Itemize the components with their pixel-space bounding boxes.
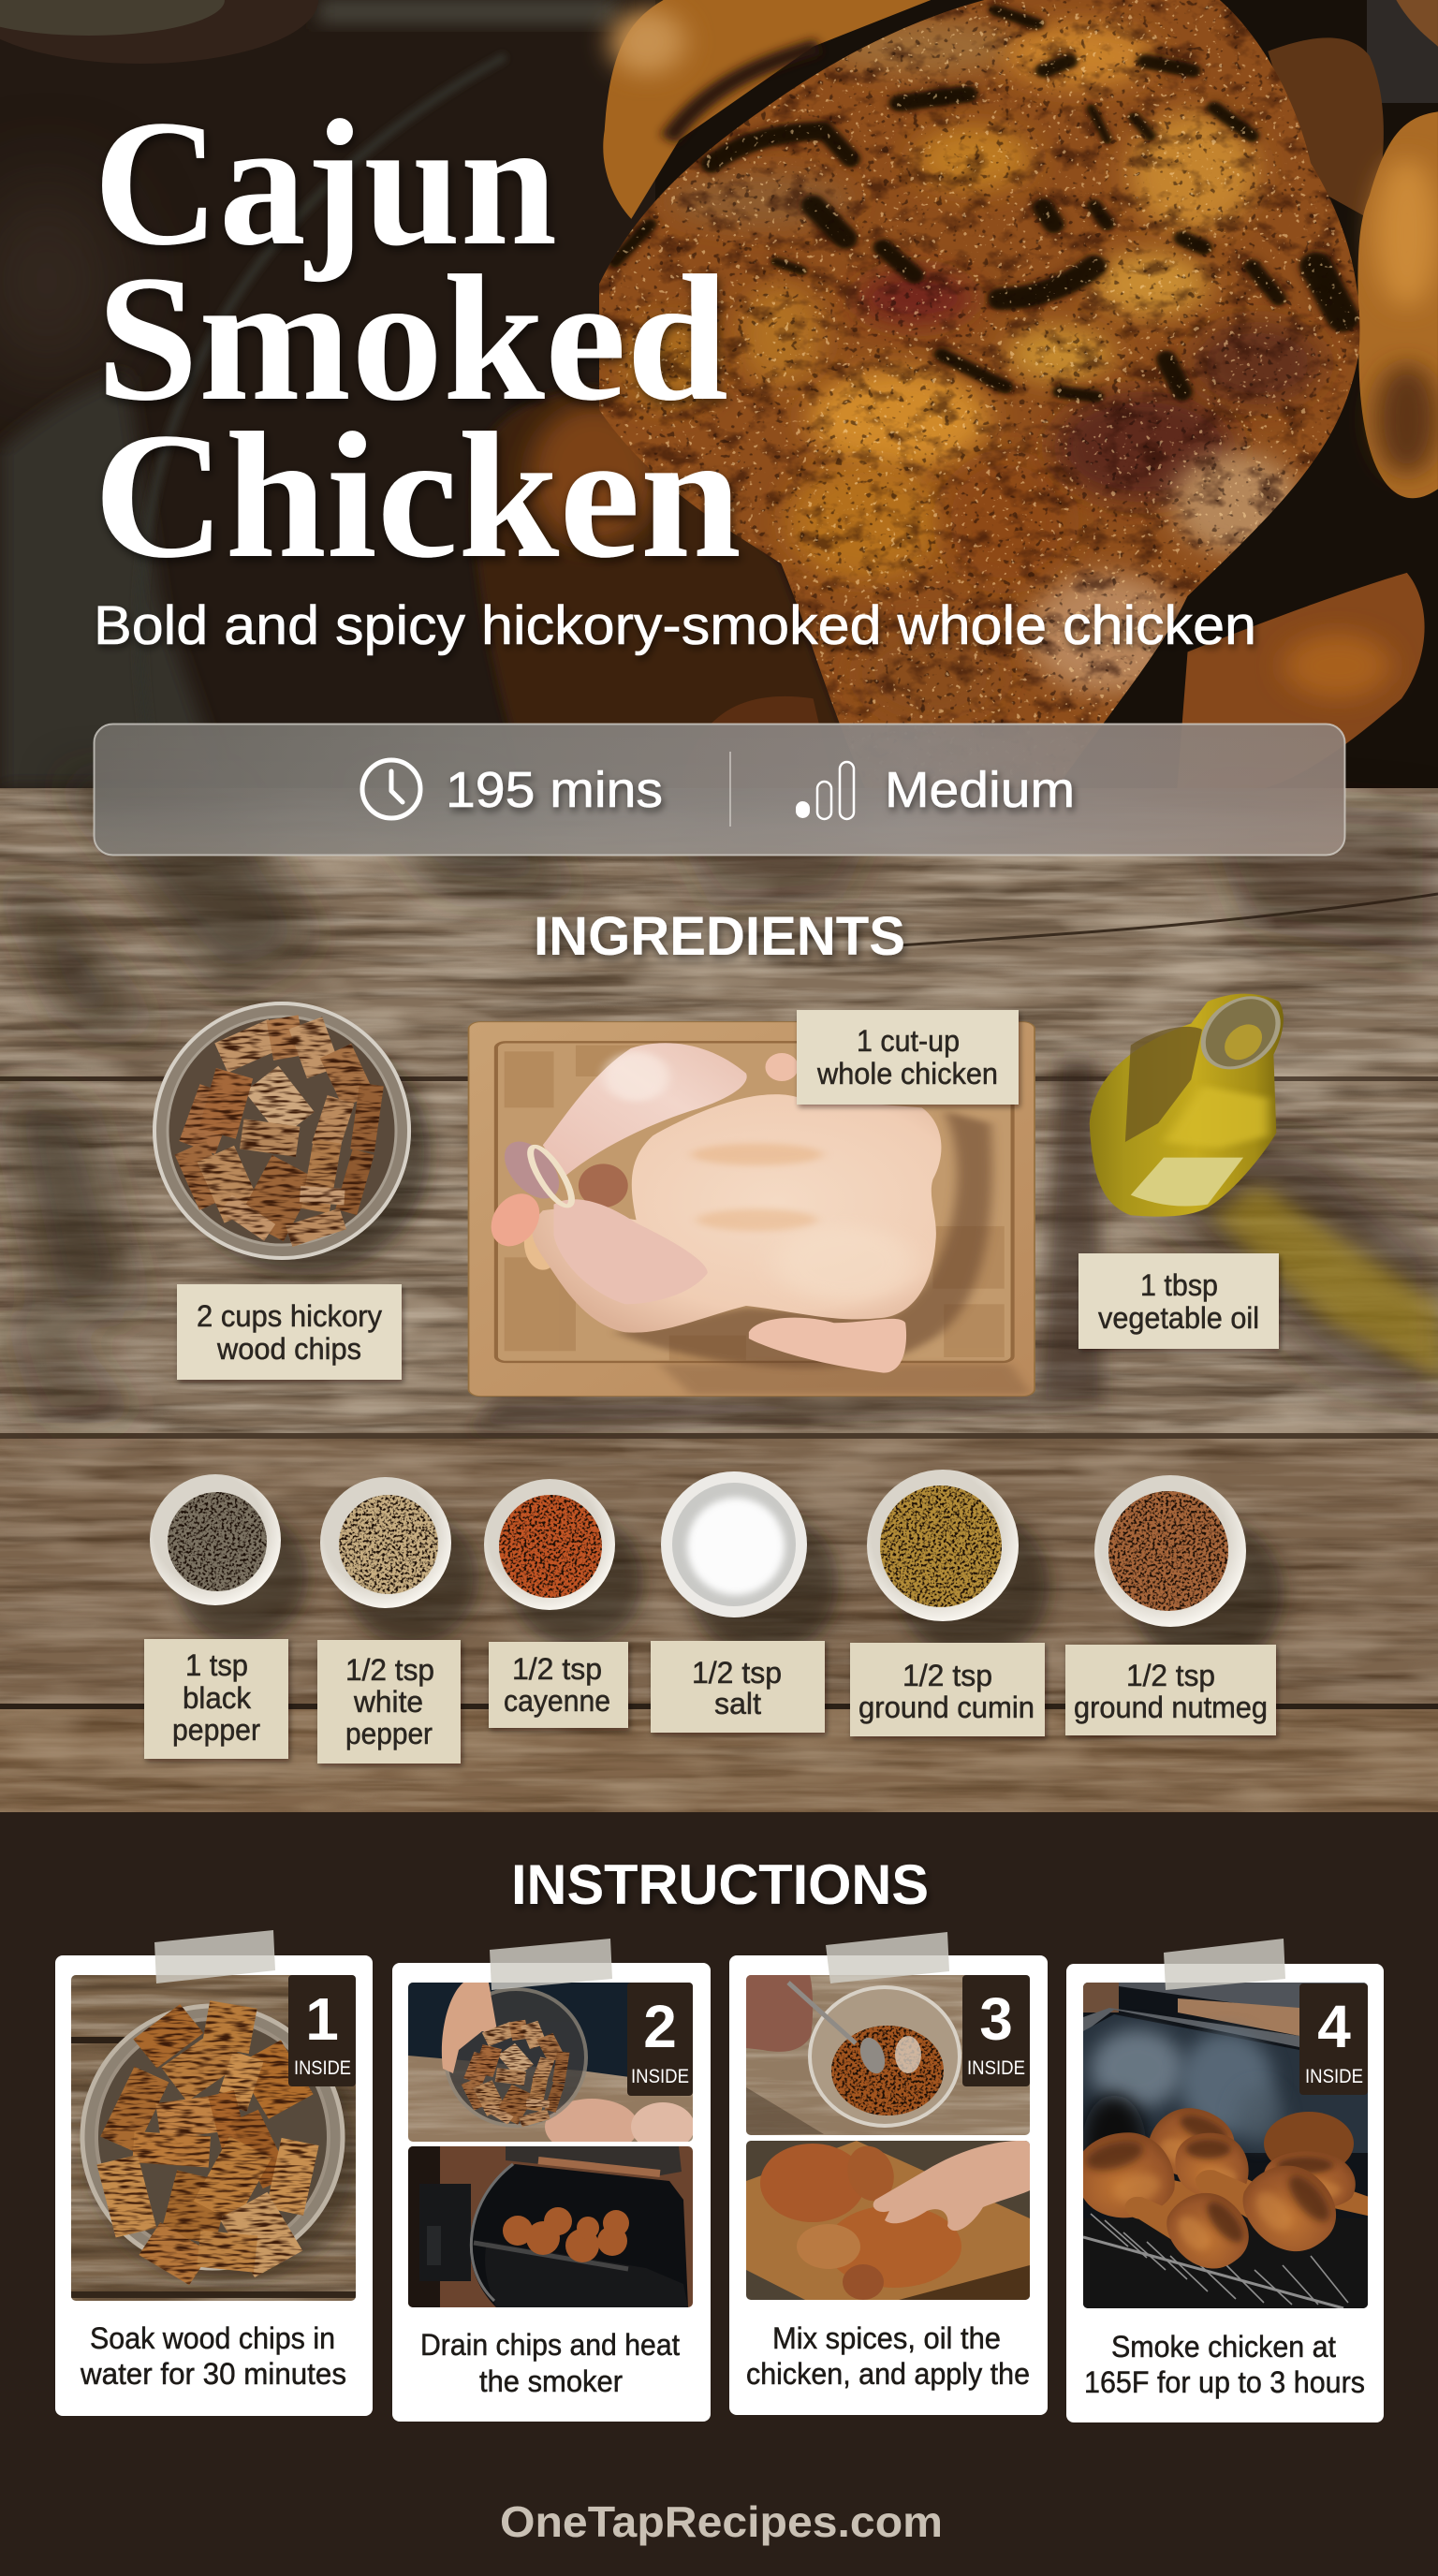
title: Smoked [96, 238, 728, 438]
step card 1 [55, 1930, 373, 2416]
step text: chicken, and apply the [746, 2357, 1030, 2391]
cutting board [469, 1022, 1034, 1397]
label: salt: 1/2 tsp [692, 1656, 782, 1690]
label: wood chips [177, 1284, 402, 1380]
tape [490, 1939, 612, 1990]
label: salt [651, 1641, 825, 1733]
breast [599, 0, 1359, 792]
step text: Mix spices, oil the [772, 2321, 1001, 2355]
label: vegetable oil: 1 tbsp [1140, 1268, 1218, 1302]
behind parts [475, 385, 839, 724]
badge [1299, 1983, 1368, 2095]
label: ground nutmeg: 1/2 tsp [1126, 1659, 1215, 1692]
panel: stats bar [94, 724, 1345, 856]
badge: INSIDE [1305, 2066, 1363, 2087]
step text [80, 2321, 346, 2391]
label: ground nutmeg: ground nutmeg [1074, 1690, 1268, 1724]
spice bowl: nutmeg [1094, 1475, 1284, 1670]
title: Chicken [94, 395, 741, 595]
label: wood chips: 2 cups hickory [197, 1299, 382, 1333]
step text: Soak wood chips in [90, 2321, 335, 2355]
badge [288, 1975, 356, 2086]
step text [746, 2321, 1030, 2391]
step text [420, 2328, 680, 2398]
badge: 1 [305, 1985, 339, 2053]
badge: INSIDE [631, 2066, 689, 2087]
label: cayenne [489, 1642, 628, 1728]
label: whole chicken: whole chicken [816, 1057, 998, 1090]
label: white pepper: 1/2 tsp [345, 1653, 434, 1687]
stat: difficulty: Medium [885, 762, 1075, 818]
photo: smoking chicken [1067, 1983, 1395, 2308]
badge: INSIDE [967, 2057, 1025, 2079]
photo: draining chips [408, 1983, 695, 2155]
label: white pepper [317, 1640, 461, 1764]
step text: Drain chips and heat [420, 2328, 680, 2362]
stat: time: 195 mins [446, 762, 663, 818]
icon: clock [362, 760, 420, 818]
label: ground nutmeg [1065, 1645, 1276, 1735]
spice bowl: black pepper [150, 1474, 309, 1644]
label: whole chicken [797, 1010, 1019, 1105]
label: black pepper [144, 1639, 288, 1759]
step text [1084, 2330, 1365, 2399]
step card 2 [392, 1939, 711, 2422]
title: Cajun [94, 82, 557, 283]
tape [826, 1932, 949, 1983]
label: whole chicken: 1 cut-up [857, 1024, 960, 1058]
panel: instructions background [0, 1812, 1438, 2576]
footer: website: OneTapRecipes.com [500, 2497, 943, 2546]
raw chicken [484, 1043, 941, 1373]
photo: soaking chips [71, 1975, 361, 2301]
step card 4 [1066, 1939, 1395, 2422]
label: ground cumin: ground cumin [858, 1690, 1034, 1724]
ingredient: hickory chips bowl [153, 1002, 431, 1275]
step card 3 [729, 1932, 1048, 2415]
label: vegetable oil: vegetable oil [1098, 1301, 1259, 1335]
label: black pepper: 1 tsp [185, 1648, 248, 1682]
photo: mixing spices [746, 1975, 1030, 2135]
heading: instructions: INSTRUCTIONS [511, 1853, 929, 1916]
step text: the smoker [479, 2364, 623, 2398]
spice bowl: white pepper [320, 1477, 479, 1646]
label: salt: salt [714, 1687, 761, 1720]
photo: rubbing chicken [746, 2140, 1030, 2300]
badge: 4 [1317, 1993, 1351, 2060]
spice bowl: cayenne [484, 1479, 644, 1647]
subtitle: Bold and spicy hickory-smoked whole chicken [94, 595, 1256, 656]
leaf shadows [0, 777, 1438, 1423]
badge: INSIDE [294, 2057, 351, 2079]
panel: wood table [0, 777, 1438, 1812]
label: ground cumin [850, 1643, 1045, 1736]
icon: difficulty bars [796, 762, 854, 819]
step text: 165F for up to 3 hours [1084, 2365, 1365, 2399]
badge [962, 1975, 1030, 2086]
ingredient: oil bottle [1090, 993, 1438, 1383]
label: cayenne: 1/2 tsp [512, 1652, 602, 1686]
spice bowl: cumin [867, 1470, 1050, 1662]
title [94, 82, 741, 595]
label: vegetable oil [1078, 1253, 1279, 1349]
label: white pepper: white [353, 1685, 423, 1719]
heading: ingredients: INGREDIENTS [534, 906, 905, 967]
label: ground cumin: 1/2 tsp [902, 1659, 992, 1692]
badge [627, 1983, 693, 2096]
tape [154, 1930, 275, 1983]
badge: 3 [979, 1985, 1013, 2053]
step text: Smoke chicken at [1111, 2330, 1336, 2364]
panel: hero photo [0, 0, 1438, 815]
step text: water for 30 minutes [80, 2357, 346, 2391]
spice bowl: salt [661, 1471, 839, 1659]
label: black pepper: pepper [172, 1713, 260, 1747]
tape [1164, 1939, 1285, 1990]
photo: smoker [408, 2146, 693, 2307]
ingredient: chicken on board [469, 1022, 1034, 1397]
badge: 2 [643, 1993, 677, 2060]
label: white pepper: pepper [345, 1717, 433, 1750]
label: black pepper: black [183, 1681, 252, 1715]
label: wood chips: wood chips [216, 1332, 361, 1366]
label: cayenne: cayenne [504, 1684, 610, 1718]
